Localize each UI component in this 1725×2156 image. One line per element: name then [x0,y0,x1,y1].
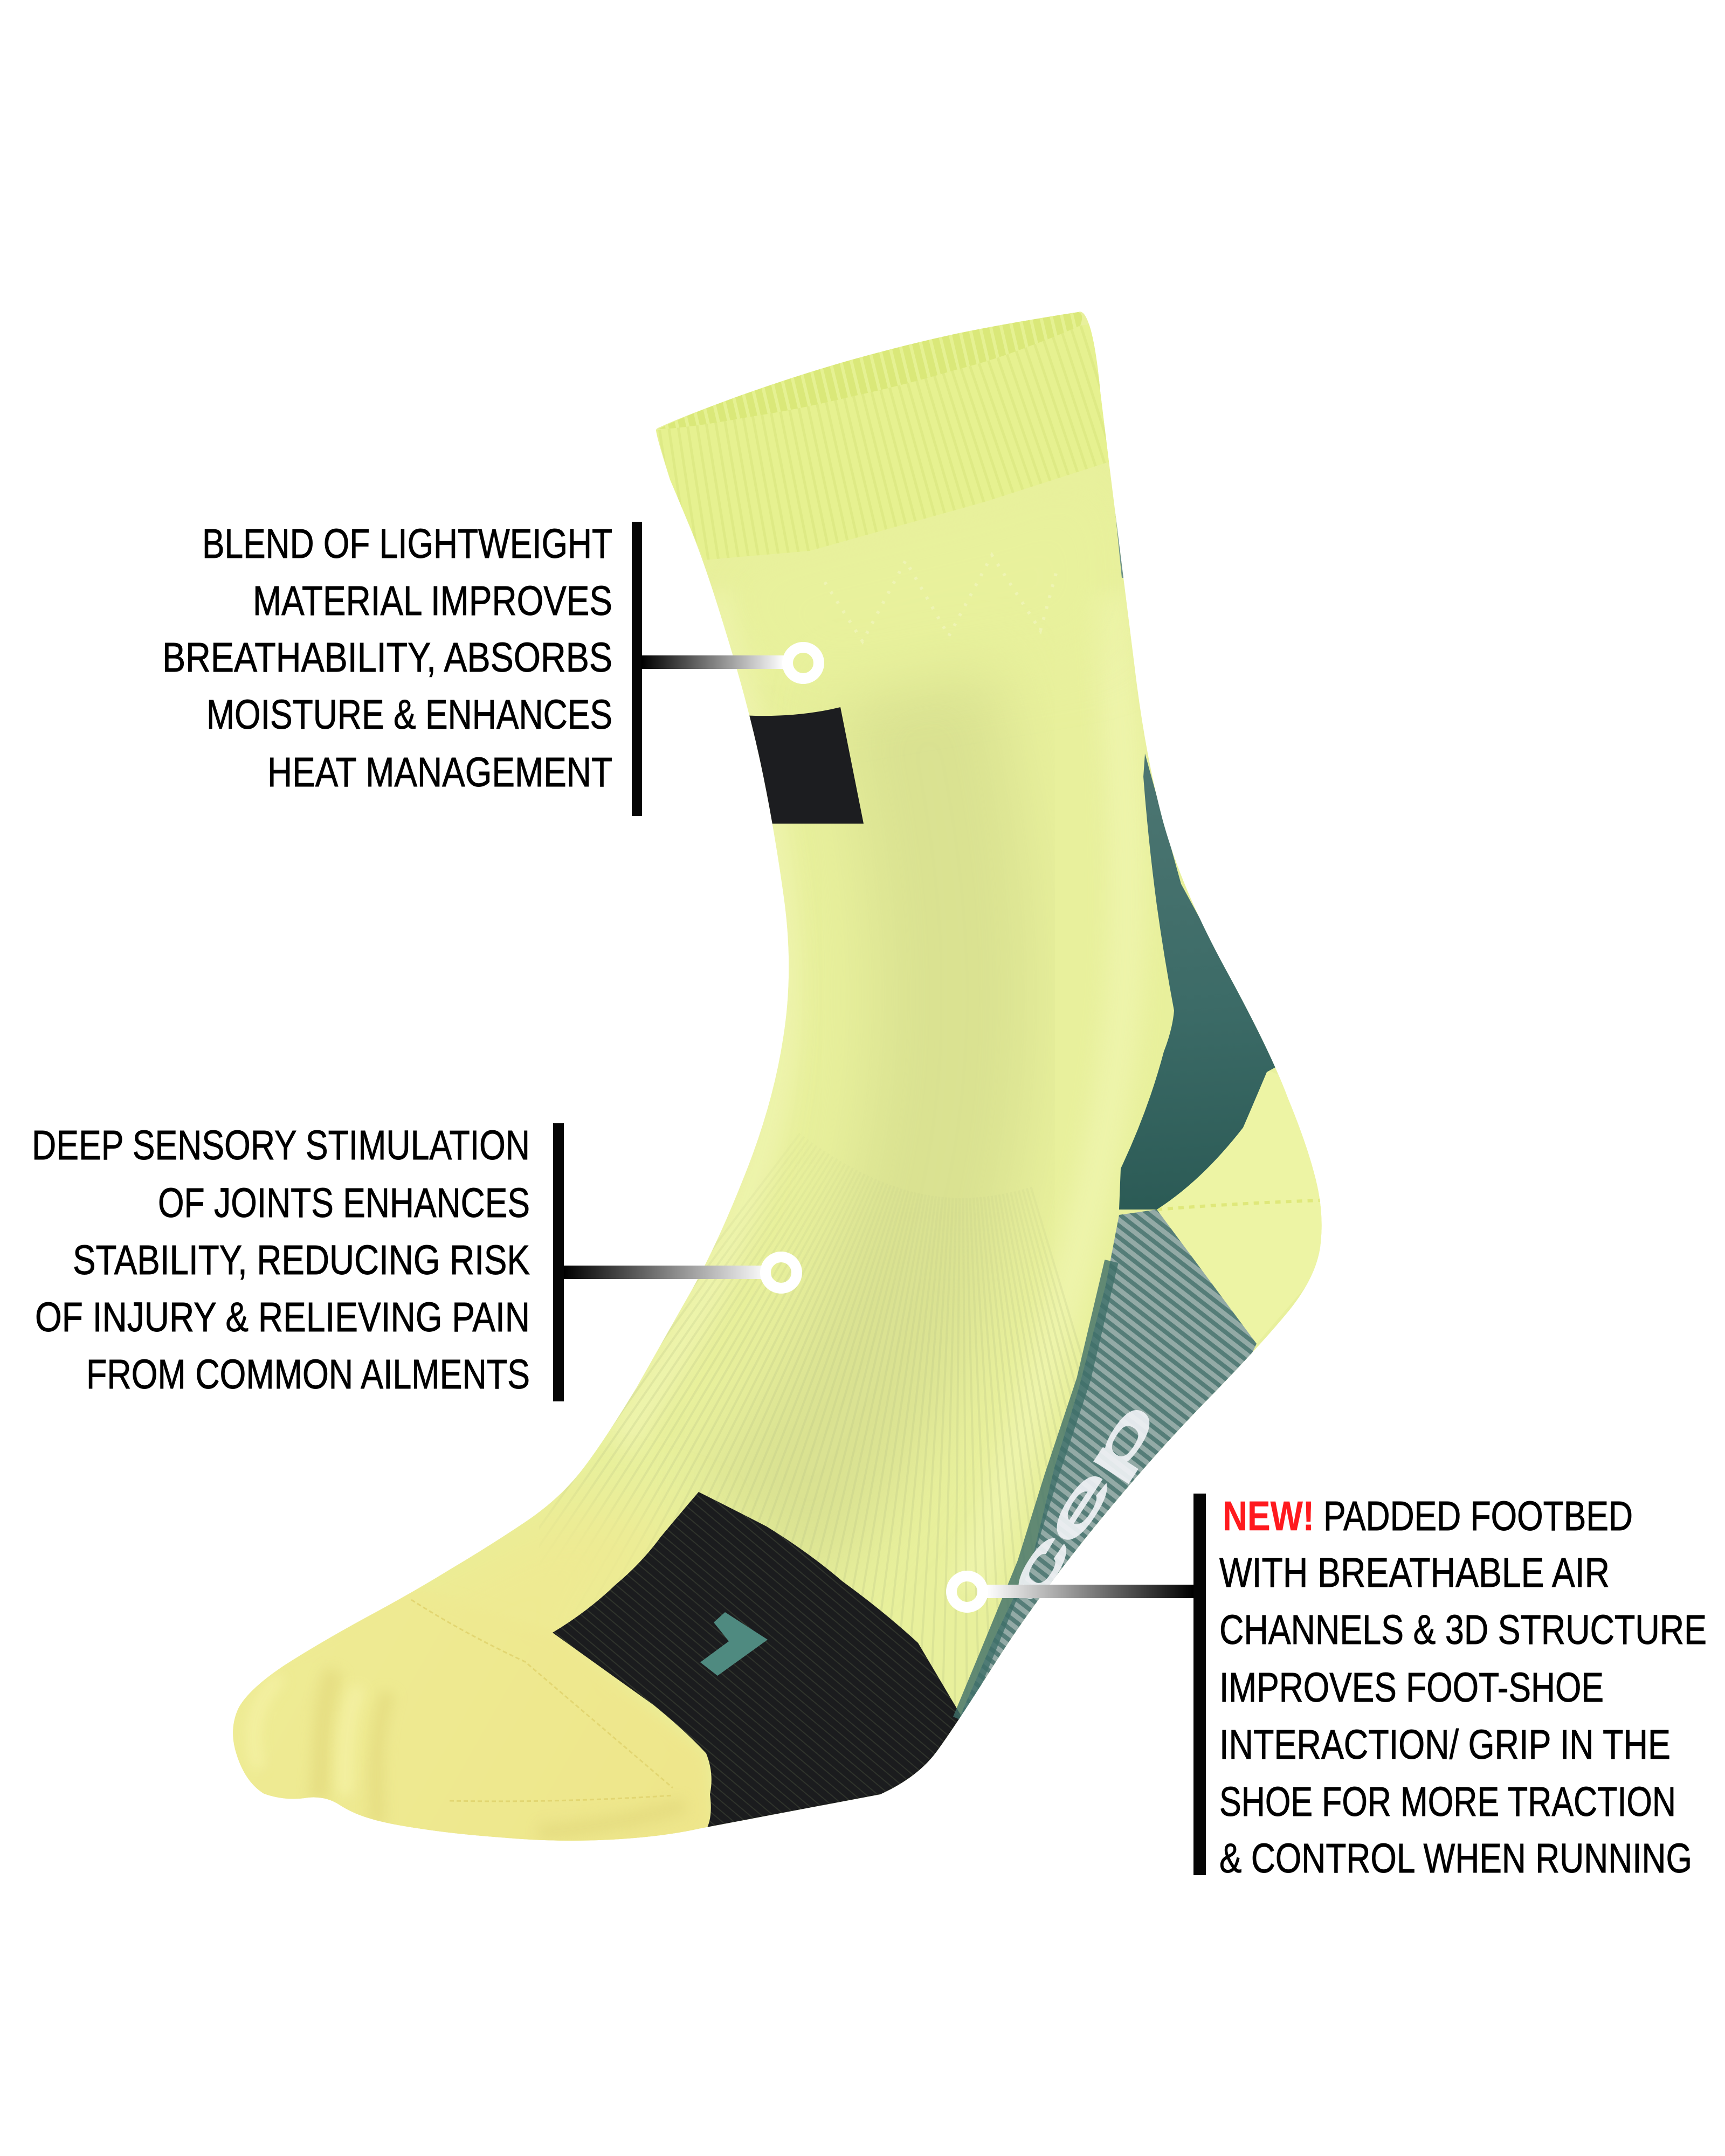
callout text: DEEP SENSORY STIMULATION [32,1122,530,1169]
leg shading [620,464,1127,1590]
callout text: FROM COMMON AILMENTS [86,1351,530,1398]
toe box [233,1589,712,1841]
vamp transition [323,1498,717,1854]
callout text: NEW! [1223,1493,1314,1539]
leader line [564,1266,770,1279]
callout bar [553,1123,564,1401]
leader line [641,655,786,669]
callout bar [1193,1494,1206,1875]
callout text: IMPROVES FOOT-SHOE [1219,1664,1604,1711]
callout text: OF JOINTS ENHANCES [158,1180,530,1226]
teal chevron on toe panel [700,1612,768,1676]
callout bar [632,522,642,816]
callout text [32,1122,530,1398]
heel patch [1278,1074,1322,1287]
callout text: MATERIAL IMPROVES [253,578,612,624]
sock body [233,312,1322,1841]
callout text: BLEND OF LIGHTWEIGHT [202,521,612,567]
callout text: PADDED FOOTBED [1323,1493,1633,1539]
toe creases [318,1671,685,1833]
knit logo on grip: cep [993,1391,1167,1614]
callout text [162,521,612,796]
leg knit ribs [636,1348,1110,1468]
callout text: BREATHABILITY, ABSORBS [162,634,612,681]
marker ring [788,647,819,679]
sock shading and panels [205,318,1337,1854]
callout text: WITH BREATHABLE AIR [1219,1550,1610,1596]
heel seam [1157,1200,1320,1210]
teal achilles panel [1119,754,1305,1210]
leader line [984,1585,1193,1598]
marker ring [765,1257,797,1288]
callout text: HEAT MANAGEMENT [267,749,612,796]
callout text: MOISTURE & ENHANCES [206,692,612,738]
grip panel dark edge [960,1261,1112,1719]
grip panel [949,1210,1257,1746]
cuff opening [647,307,1094,437]
breathable knit sparkle [825,555,1057,641]
marker ring [951,1576,983,1607]
callout text [1219,1493,1707,1882]
callout: breathability [162,521,819,816]
callout text: OF INJURY & RELIEVING PAIN [35,1294,530,1340]
callout: padded footbed [951,1493,1707,1882]
toe fold stitching [411,1600,673,1801]
black ankle patch [733,707,864,824]
sock product image [205,307,1337,1854]
callout: sensory stimulation [32,1122,797,1401]
callout text: STABILITY, REDUCING RISK [73,1237,530,1283]
ribbed cuff [647,318,1121,566]
toe-side black panel [553,1492,965,1838]
teal sliver at calf [1114,502,1137,578]
toe highlights [253,1676,358,1795]
